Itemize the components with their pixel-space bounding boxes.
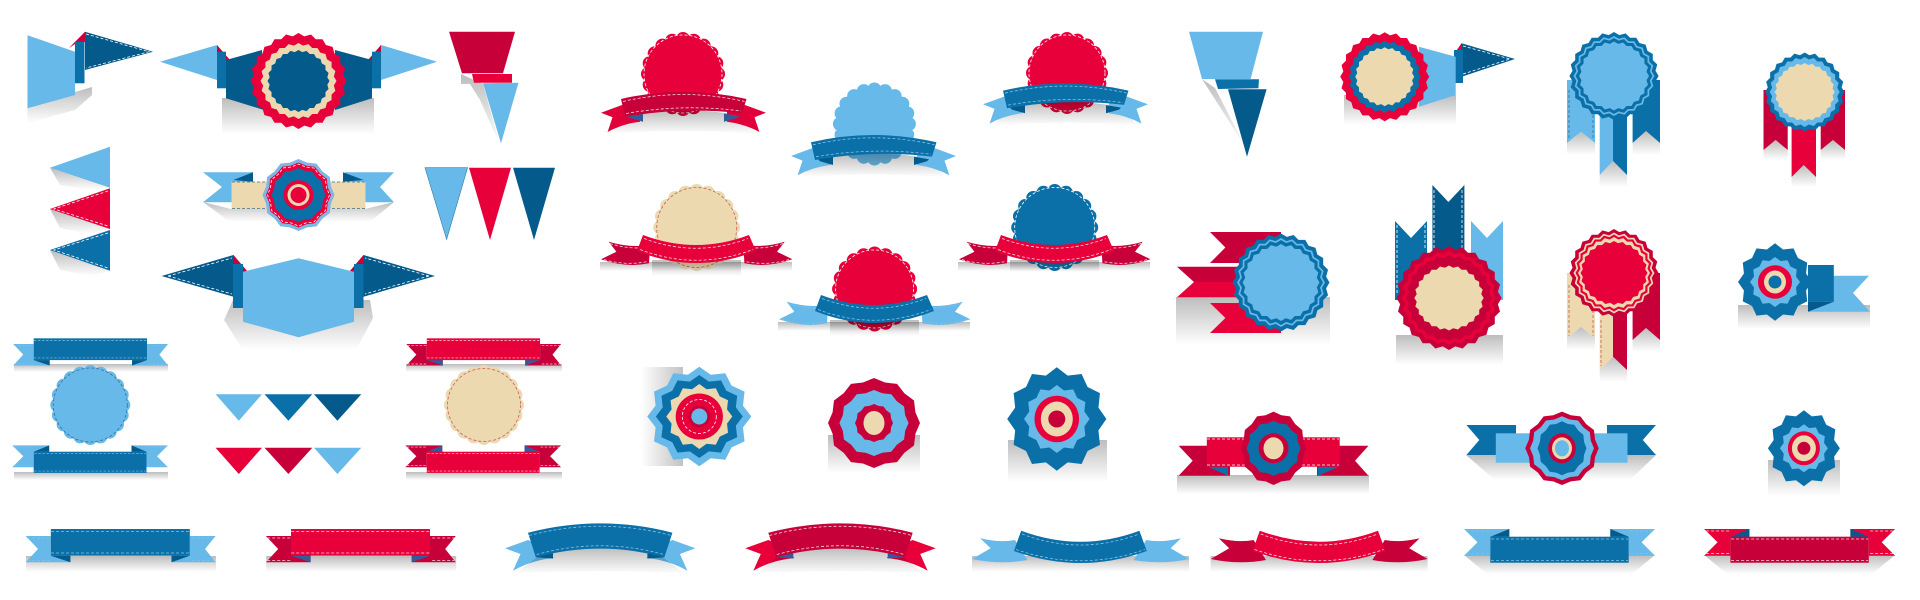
light star rosette with side shadow: [641, 367, 751, 466]
bunting: light blue, red, dark: [425, 168, 555, 240]
red rosette with cream and red tails: [1567, 229, 1660, 382]
large light blue hexagon ribbon: [162, 255, 435, 350]
blue ribbon rosette: [1466, 412, 1656, 485]
blue zigzag seal with red tails: [1176, 232, 1330, 345]
badge: dark ribbon with red zigzag seal: [160, 33, 437, 134]
flat blue ribbon: [26, 529, 216, 572]
flat blue ribbon with raised tails: [1464, 529, 1655, 574]
rosette with cream ribbon: [203, 159, 394, 231]
top-bottom ribbons with light oval: [12, 338, 168, 480]
dark star rosette: [1007, 367, 1107, 482]
badge A: red scallop with red arched ribbon: [601, 35, 766, 134]
arched red ribbon: [745, 523, 936, 574]
blue rosette with three tails: [1567, 32, 1660, 187]
triple side pennants: [50, 147, 110, 276]
red zigzag seal with flag: [1340, 32, 1515, 125]
bolt pennant: light and dark blue: [1189, 32, 1267, 157]
red zigzag seal with three blue flags: [1395, 185, 1503, 365]
cream rosette with red tails: [1764, 52, 1845, 187]
smile red ribbon: [1211, 531, 1428, 572]
red wavy rosette: [828, 378, 920, 473]
red rosette with red ribbon: [1177, 412, 1369, 494]
flat red ribbon: [266, 529, 456, 572]
flat red ribbon with raised tails: [1704, 529, 1895, 574]
badge D: cream scallop with red smile ribbon: [600, 188, 792, 276]
badge E: blue scallop with red smile ribbon: [958, 188, 1150, 272]
blue star rosette with flag: [1738, 243, 1870, 329]
small dark star rosette: [1768, 410, 1840, 496]
small bunting rows: [216, 394, 361, 474]
smile blue ribbon: [972, 531, 1189, 572]
bolt pennant: red and light blue: [449, 32, 518, 145]
badge F: red scallop with blue smile ribbon: [778, 250, 970, 336]
top-bottom red ribbons with cream oval: [405, 338, 562, 480]
badge B: light scallop with blue arched ribbon: [791, 90, 956, 177]
badge C: red scallop with blue arched ribbon: [983, 35, 1148, 126]
arched blue ribbon: [505, 523, 695, 574]
flag: light blue and dark pennant: [28, 32, 153, 123]
